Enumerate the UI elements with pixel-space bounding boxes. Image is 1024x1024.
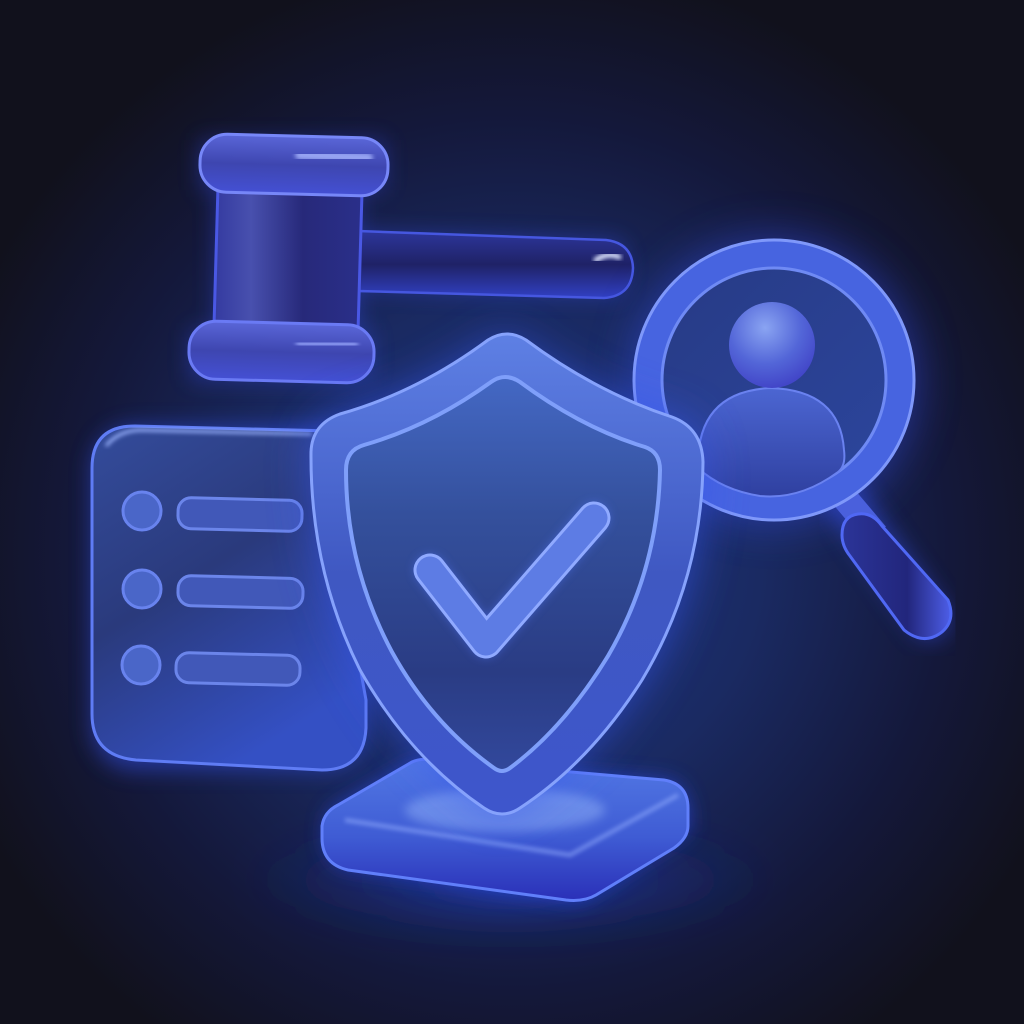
gavel top cap highlight <box>300 155 368 158</box>
magnifier inner rim <box>662 268 886 492</box>
magnifier ring <box>648 254 900 506</box>
icon: gavel <box>188 134 633 383</box>
checkmark glow <box>430 518 594 642</box>
line 2 <box>178 575 303 609</box>
document glow <box>92 426 367 770</box>
checkmark <box>430 518 594 642</box>
magnifier neck <box>838 490 876 535</box>
base top edge <box>345 795 678 855</box>
base plate <box>322 759 688 900</box>
magnifier glow <box>632 238 916 522</box>
base body <box>322 759 688 900</box>
gavel top cap <box>199 134 389 196</box>
bullet 2 <box>123 570 161 608</box>
magnifier grip <box>842 514 951 639</box>
shield outer <box>311 334 703 814</box>
panel: checklist document <box>92 426 367 770</box>
gavel bottom cap highlight <box>300 343 354 345</box>
person bust <box>698 388 844 496</box>
gavel glow <box>190 140 627 380</box>
icon: magnifier with person <box>632 238 951 639</box>
person head <box>729 302 815 388</box>
floor glow <box>240 825 780 935</box>
base glow <box>327 762 688 900</box>
line 3 <box>176 652 300 686</box>
gavel handle highlight <box>596 255 619 260</box>
shield glow <box>311 334 703 816</box>
magnifier handle glow <box>845 500 930 620</box>
line 1 <box>178 497 302 532</box>
checkmark rim <box>430 518 594 642</box>
bullet 3 <box>122 646 160 684</box>
base top light <box>405 788 605 832</box>
gavel bottom cap <box>188 321 375 383</box>
bullet 1 <box>123 492 161 530</box>
shield inner <box>346 377 660 771</box>
gavel handle <box>358 231 633 298</box>
gavel head body <box>214 186 362 332</box>
document top rim <box>106 430 312 446</box>
icon: shield with check <box>311 334 703 816</box>
magnifier ring rim <box>634 240 914 520</box>
document body <box>92 426 366 770</box>
